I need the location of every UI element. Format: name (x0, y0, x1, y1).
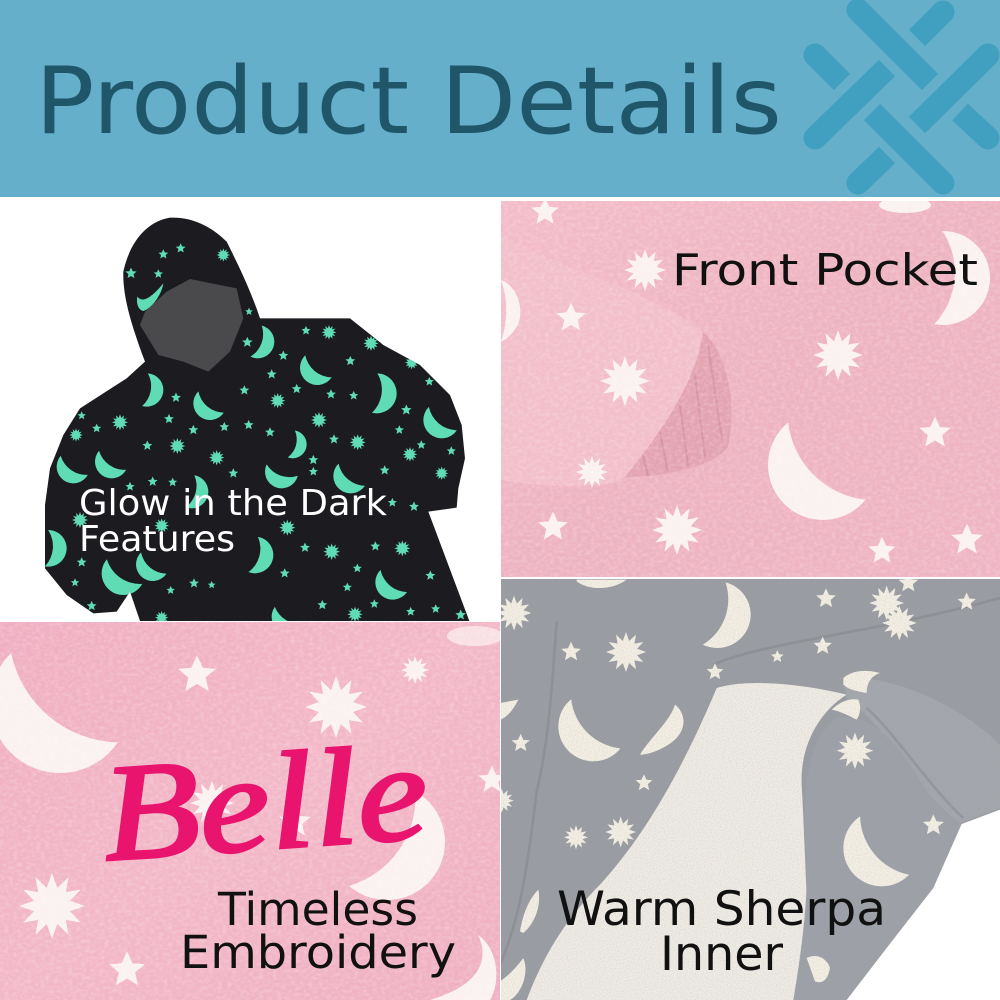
header banner (0, 0, 1000, 197)
label: timeless embroidery: Timeless (217, 883, 418, 936)
label: timeless embroidery (184, 890, 455, 978)
label: glow in the dark features: Features (79, 519, 235, 560)
label: front pocket: Front Pocket (672, 245, 978, 296)
fabric moons and stars (0, 626, 506, 1000)
panel: embroidery (0, 622, 506, 1000)
sleeve (501, 300, 702, 486)
ribbed cuff (625, 332, 731, 477)
icon: woven cross logo (804, 0, 1000, 194)
label: glow in the dark features: Glow in the Dark (79, 483, 387, 524)
label: timeless embroidery: Embroidery (180, 926, 456, 979)
panel: sherpa (490, 573, 1000, 1000)
sleeve moon and stars (501, 249, 666, 488)
fabric moons and stars (531, 197, 994, 563)
panel: front pocket (501, 197, 1000, 577)
grey fabric artwork (490, 573, 1000, 1000)
hoodie illustration (45, 218, 469, 639)
fleece texture (501, 201, 1000, 577)
fleece texture (0, 622, 500, 1000)
label: warm sherpa inner: Warm Sherpa (557, 882, 886, 937)
panel: glow in the dark hoodie (45, 218, 469, 639)
label: warm sherpa inner: Inner (660, 927, 784, 982)
label: warm sherpa inner (558, 889, 882, 970)
label: glow in the dark features (81, 488, 387, 552)
embroidered name: Belle (97, 715, 432, 890)
title: Product Details (35, 47, 782, 155)
